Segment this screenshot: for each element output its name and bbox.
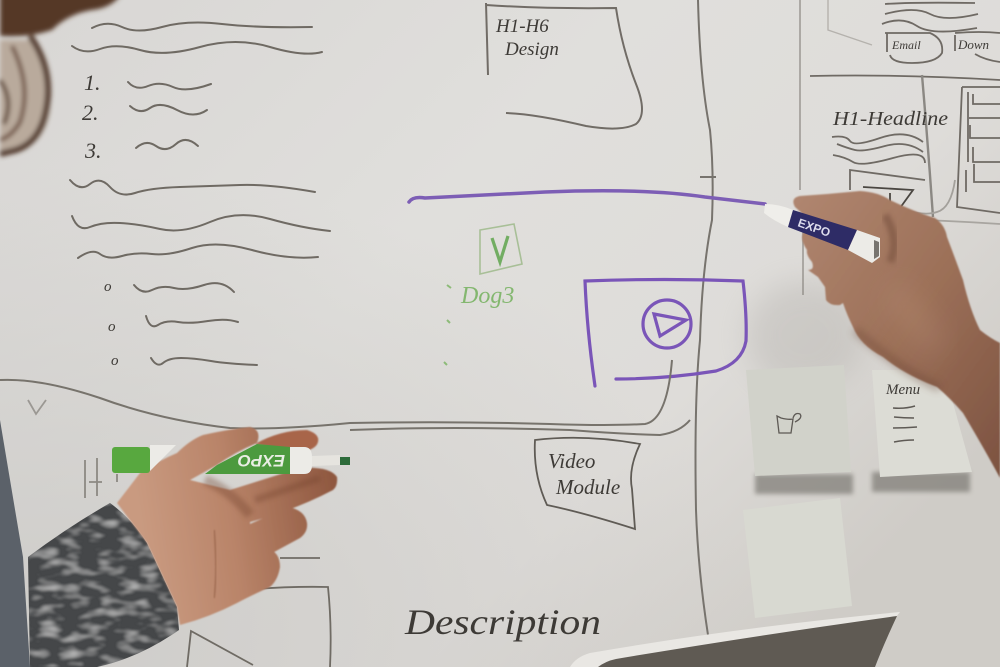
body and left sleeve xyxy=(0,420,179,667)
right hand and arm xyxy=(793,191,1000,478)
numbered list markers: o xyxy=(104,279,112,295)
lower sketches xyxy=(28,400,331,667)
top right wireframe sketches: Email xyxy=(891,38,921,52)
numbered list markers: 1. xyxy=(84,70,100,95)
green marker: EXPO xyxy=(238,451,285,470)
purple video module wireframe xyxy=(585,280,746,386)
purple marker xyxy=(764,204,880,263)
purple marker line xyxy=(409,191,765,204)
top right wireframe sketches: H1-Headline xyxy=(832,108,948,130)
numbered list markers: o xyxy=(108,319,116,335)
H1-H6 design box: H1-H6 xyxy=(495,16,549,37)
sticky notes xyxy=(743,365,972,618)
green sketch xyxy=(444,224,522,365)
left column of wavy notes xyxy=(70,23,330,365)
H1-H6 design box: Design xyxy=(504,39,559,60)
vertical divider lines xyxy=(696,0,803,635)
top right wireframe sketches xyxy=(810,0,1000,224)
numbered list markers xyxy=(82,70,119,369)
sticky notes: Menu xyxy=(885,382,920,398)
horizontal wireframe line xyxy=(0,360,690,435)
green sketch: Dog3 xyxy=(460,283,514,309)
description text: Description xyxy=(404,602,601,642)
H1-H6 design box xyxy=(486,3,642,129)
numbered list markers: 2. xyxy=(82,100,98,125)
green marker xyxy=(112,444,350,474)
numbered list markers: 3. xyxy=(84,138,102,163)
purple marker: EXPO xyxy=(796,216,832,240)
left hand xyxy=(117,427,337,625)
hair top left xyxy=(0,0,124,156)
top right wireframe sketches: Down xyxy=(957,37,989,52)
numbered list markers: o xyxy=(111,353,119,369)
video module note: Video xyxy=(548,449,595,473)
video module note: Module xyxy=(555,475,620,499)
laptop xyxy=(570,612,900,667)
video module note xyxy=(535,438,640,529)
